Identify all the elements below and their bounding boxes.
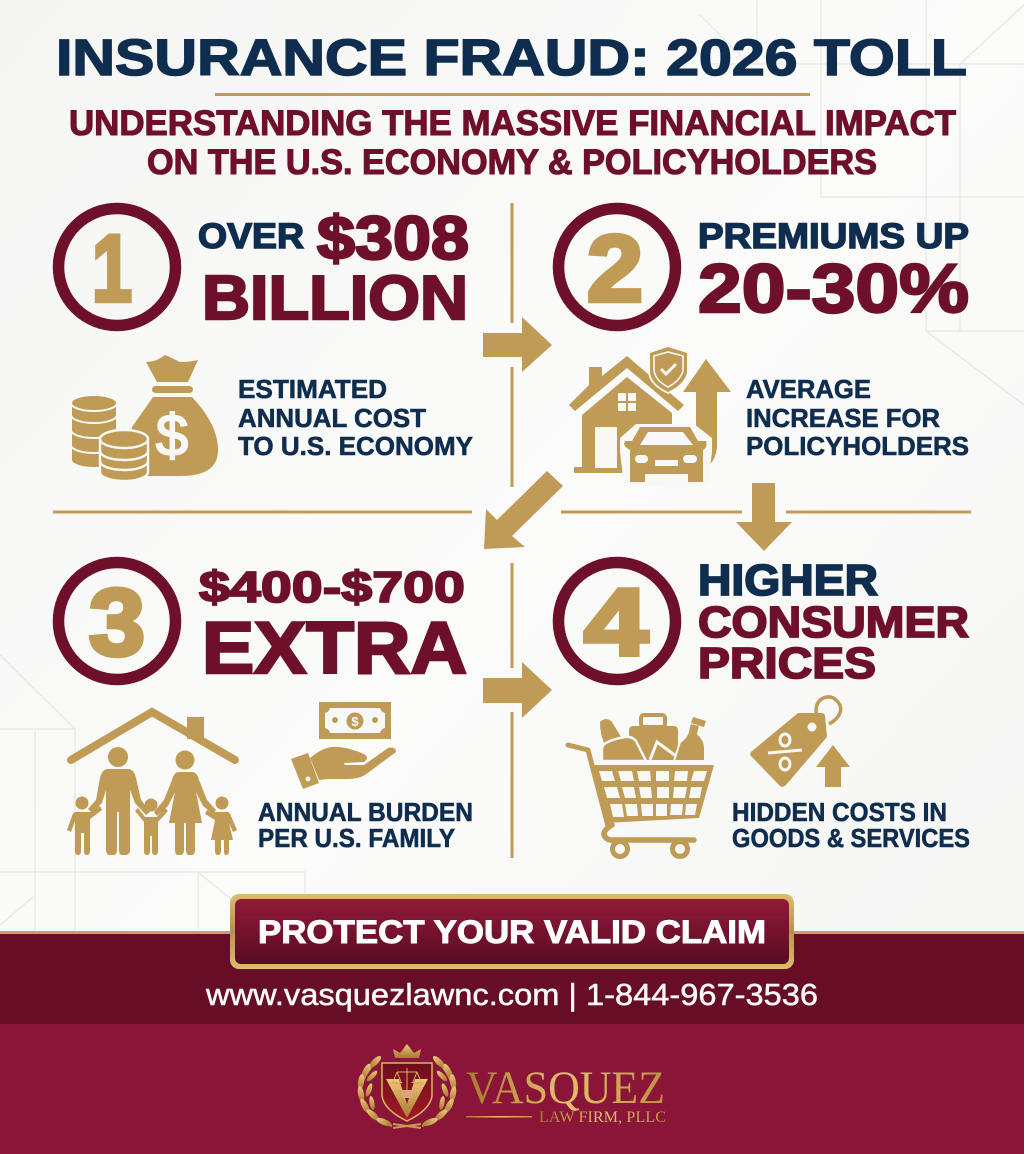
button: protect your valid claim: PROTECT YOUR VALID CLAIM [258,914,766,950]
number badge 3: 3 [89,570,145,676]
logo rule [466,1116,532,1118]
subtitle: UNDERSTANDING THE MASSIVE FINANCIAL IMPACT [69,104,956,143]
panel: premiums up 20-30% [558,208,969,486]
heading: HIGHER [698,556,878,605]
icon: house, shield, car and arrow [569,345,731,486]
heading [198,204,469,333]
dividers [53,203,971,858]
arrow: step 3 to 4 [483,662,552,718]
caption [238,374,473,461]
caption: GOODS & SERVICES [732,823,970,853]
number badge 4 [558,562,676,680]
arrow: step 1 to 2 [483,317,552,372]
heading: EXTRA [202,608,467,689]
caption [746,374,969,461]
heading [698,217,969,327]
caption [732,797,970,853]
arrow: step 2 to 4 [736,483,792,551]
logo wordmark: VASQUEZ [466,1062,665,1114]
number badge 1: 1 [92,216,132,322]
title: INSURANCE FRAUD: 2026 TOLL [56,29,967,86]
title underline [215,93,810,96]
number badge 4: 4 [584,570,648,676]
caption: POLICYHOLDERS [746,431,969,461]
caption [258,797,473,853]
heading: BILLION [202,264,468,333]
icon: hand holding cash [291,702,396,789]
arrow: step 2 to 3 [484,471,563,549]
icon: money bag and coins [71,355,218,481]
crown [393,1044,421,1058]
number badge 1 [58,208,176,326]
icon: hand holding cash: $ [351,714,359,729]
caption: INCREASE FOR [746,403,940,433]
caption: ESTIMATED [238,374,387,404]
icon: price tag with up arrow [750,697,850,787]
heading: OVER [198,217,304,256]
caption: TO U.S. ECONOMY [238,431,473,461]
number badge 2: 2 [587,216,643,322]
caption: ANNUAL COST [238,403,426,433]
icon: family under a roof [67,712,237,855]
button: protect your valid claim [230,894,794,969]
subtitle: ON THE U.S. ECONOMY & POLICYHOLDERS [147,143,877,182]
heading [698,556,969,688]
caption: PER U.S. FAMILY [258,823,455,853]
heading: $400-$700 [199,563,465,612]
icon: shopping cart [568,715,714,856]
caption: AVERAGE [746,374,871,404]
icon: money bag and coins: $ [156,403,188,468]
heading: $308 [317,204,469,272]
website and phone: www.vasquezlawnc.com | 1-844-967-3536 [205,977,818,1012]
panel: over $308 billion [58,204,473,481]
heading: 20-30% [698,250,969,327]
heading: PREMIUMS UP [698,217,969,256]
subtitle [69,104,956,182]
heading: PRICES [698,639,876,688]
panel: higher consumer prices [558,556,970,856]
logo: Vasquez Law Firm [357,1044,666,1128]
logo emblem [357,1044,457,1128]
caption: ANNUAL BURDEN [258,797,473,827]
footer band: contact [0,931,1024,1024]
heading: CONSUMER [698,598,969,647]
number badge 3 [58,562,176,680]
logo subline: LAW FIRM, PLLC [539,1109,666,1126]
caption: HIDDEN COSTS IN [732,797,947,827]
heading [199,563,467,689]
footer band: logo area [0,1024,1024,1154]
number badge 2 [558,208,676,326]
panel: $400-$700 extra [58,562,473,855]
